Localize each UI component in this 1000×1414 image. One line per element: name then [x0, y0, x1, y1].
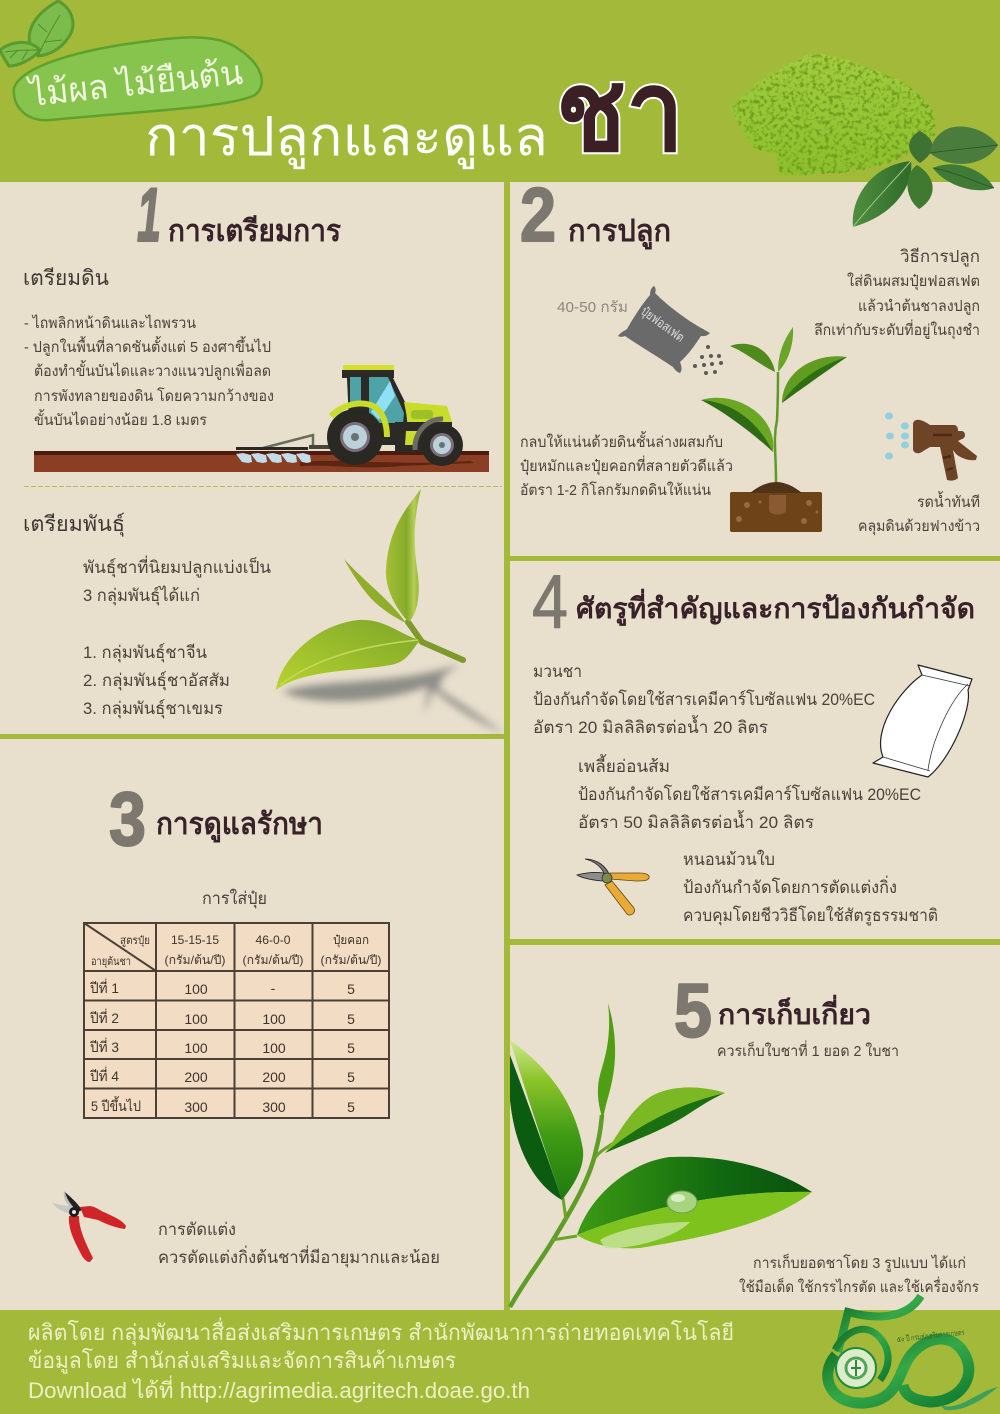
table: fertilizer rates: ปีที่ 1 — [90, 979, 119, 996]
text block: leaf roller — [683, 849, 938, 926]
illustration: fresh tea branch — [510, 1003, 812, 1307]
subheading: fertilizing: การใส่ปุ๋ย — [202, 888, 267, 909]
table: fertilizer rates: (กรัม/ต้น/ปี) — [320, 953, 382, 967]
table: fertilizer rates: 5 — [347, 1011, 355, 1027]
text block: tea bug: ป้องกันกำจัดโดยใช้สารเคมีคาร์โบซัลแฟน 20%EC — [533, 689, 875, 709]
footer: credits: Download ได้ที่ http://agrimedia.agritech.doae.go.th — [28, 1375, 530, 1403]
text block: tea varieties: 3 กลุ่มพันธุ์ได้แก่ — [83, 585, 200, 606]
panel: preparation — [0, 173, 504, 734]
footer: credits — [0, 1310, 1000, 1414]
text block: watering: รดน้ำทันที — [917, 491, 980, 511]
table: fertilizer rates: 100 — [262, 1040, 286, 1056]
table: fertilizer rates: (กรัม/ต้น/ปี) — [164, 953, 226, 967]
table: fertilizer rates: ปีที่ 2 — [90, 1009, 119, 1026]
text block: planting method: แล้วนำต้นชาลงปลูก — [858, 298, 980, 315]
icon: white chemical bag — [873, 665, 972, 777]
icon: phosphate fertilizer bag: ปุ๋ยฟอสเฟต — [638, 303, 688, 346]
text block: orange aphid: อัตรา 50 มิลลิลิตรต่อน้ำ 20 ลิตร — [578, 810, 814, 832]
text block: orange aphid: ป้องกันกำจัดโดยใช้สารเคมีคาร์โบซัลแฟน 20%EC — [578, 784, 921, 804]
panel: planting — [510, 173, 1000, 556]
number 4: 4 — [532, 560, 568, 645]
heading: pests: ศัตรูที่สำคัญและการป้องกันกำจัด — [576, 588, 975, 626]
heading: care: การดูแลรักษา — [156, 808, 323, 843]
text block: planting method: ลึกเท่ากับระดับที่อยู่ในถุงชำ — [814, 319, 980, 340]
table: fertilizer rates: ปุ๋ยคอก — [333, 933, 369, 948]
table: fertilizer rates: 100 — [184, 1011, 208, 1027]
table: fertilizer rates: 200 — [262, 1069, 286, 1085]
text block: planting method: วิธีการปลูก — [900, 247, 980, 267]
text block: tea bug — [533, 662, 875, 737]
text block: tea bug: มวนชา — [533, 662, 582, 681]
heading: harvest: การเก็บเกี่ยว — [718, 994, 871, 1030]
text block: soil preparation: การพังทลายของดิน โดยความกว้างของ — [34, 387, 274, 405]
text block: watering — [858, 491, 980, 536]
illustration: young tea leaf — [276, 489, 504, 733]
text block: pruning — [158, 1220, 440, 1268]
table: fertilizer rates: 300 — [184, 1099, 208, 1115]
table: fertilizer rates: อายุต้นชา — [91, 956, 131, 968]
text block: harvest methods — [739, 1253, 979, 1296]
text block: covering soil: ปุ๋ยหมักและปุ๋ยคอกที่สลายตัวดีแล้ว — [520, 455, 733, 476]
table: fertilizer rates: 5 ปีขึ้นไป — [91, 1096, 141, 1114]
table: fertilizer rates: 5 — [347, 1099, 355, 1115]
table: fertilizer rates: 100 — [262, 1011, 286, 1027]
text block: covering soil — [520, 431, 733, 499]
dashed divider — [24, 486, 502, 488]
text block: tea varieties: 3. กลุ่มพันธุ์ชาเขมร — [83, 699, 223, 719]
text block: soil preparation: - ปลูกในพื้นที่ลาดชันตั้งแต่ 5 องศาขึ้นไป — [24, 336, 271, 356]
panel: care — [0, 739, 504, 1310]
subheading: soil preparation: เตรียมดิน — [23, 267, 109, 290]
text block: tea varieties: 1. กลุ่มพันธุ์ชาจีน — [83, 643, 207, 663]
text block: soil preparation — [24, 314, 274, 429]
text block: tea varieties — [83, 555, 271, 719]
badge: fruit and perennial trees — [0, 1, 262, 120]
text block: pruning: ควรตัดแต่งกิ่งต้นชาที่มีอายุมากและน้อย — [158, 1245, 440, 1268]
text block: watering: คลุมดินด้วยฟางข้าว — [858, 518, 980, 536]
text block: soil preparation: - ไถพลิกหน้าดินและไถพรวน — [24, 314, 196, 332]
table: fertilizer rates: - — [271, 980, 276, 996]
text block: leaf roller: ควบคุมโดยชีววิธีโดยใช้สัตรูธรรมชาติ — [683, 905, 938, 926]
illustration: tea seedling in soil — [701, 327, 847, 532]
text block: harvest methods: ใช้มือเด็ด ใช้กรรไกรตัด และใช้เครื่องจักร — [739, 1276, 979, 1296]
title: tea: ชา — [556, 49, 684, 174]
panel: pests — [510, 560, 1000, 939]
number 3: 3 — [109, 777, 146, 862]
number 2: 2 — [520, 173, 556, 258]
table: fertilizer rates: 15-15-15 — [171, 933, 219, 947]
panel: harvest — [510, 945, 1000, 1310]
text block: pruning: การตัดแต่ง — [158, 1220, 236, 1239]
text block: planting method: ใส่ดินผสมปุ๋ยฟอสเฟต — [847, 272, 980, 291]
footer: credits: ข้อมูลโดย สำนักส่งเสริมและจัดการสินค้าเกษตร — [28, 1348, 456, 1374]
text block: tea varieties: พันธุ์ชาที่นิยมปลูกแบ่งเป็น — [83, 555, 271, 578]
table: fertilizer rates: ปีที่ 4 — [90, 1067, 119, 1084]
footer: credits: ผลิตโดย กลุ่มพัฒนาสื่อส่งเสริมการเกษตร สำนักพัฒนาการถ่ายทอดเทคโนโลยี — [28, 1317, 734, 1346]
text block: covering soil: กลบให้แน่นด้วยดินชั้นล่างผสมกับ — [520, 431, 723, 451]
text block: soil preparation: ขั้นบันไดอย่างน้อย 1.8 เมตร — [34, 409, 207, 429]
badge: fruit and perennial trees: ไม้ผล ไม้ยืนต้น — [25, 53, 245, 114]
icon: phosphate fertilizer bag — [618, 286, 723, 375]
heading: preparation: การเตรียมการ — [168, 215, 341, 248]
table: fertilizer rates: 300 — [262, 1099, 286, 1115]
logo: 50th anniversary emblem — [828, 1296, 998, 1410]
table: fertilizer rates: 46-0-0 — [256, 933, 291, 947]
text block: leaf roller: หนอนม้วนใบ — [683, 849, 775, 869]
text block: planting method — [814, 247, 980, 340]
illustration: tractor ploughing — [34, 365, 489, 472]
table: fertilizer rates: 100 — [184, 981, 208, 997]
number 1: 1 — [137, 173, 161, 258]
illustration: fresh tea leaves over powder — [853, 126, 998, 227]
text: harvest stage: ควรเก็บใบชาที่ 1 ยอด 2 ใบชา — [717, 1040, 899, 1060]
text block: soil preparation: ต้องทำขั้นบันไดและวางแนวปลูกเพื่อลด — [34, 360, 271, 380]
table: fertilizer rates: (กรัม/ต้น/ปี) — [242, 953, 304, 967]
title: growing and caring: การปลูกและดูแล — [145, 107, 548, 169]
table: fertilizer rates: 5 — [347, 1069, 355, 1085]
text block: harvest methods: การเก็บยอดชาโดย 3 รูปแบบ ได้แก่ — [753, 1253, 966, 1272]
heading: planting: การปลูก — [568, 215, 671, 250]
label: fertilizer amount: 40-50 กรัม — [557, 299, 628, 316]
table: fertilizer rates: สูตรปุ๋ย — [120, 935, 150, 947]
table: fertilizer rates: 5 — [347, 1040, 355, 1056]
text block: tea bug: อัตรา 20 มิลลิลิตรต่อน้ำ 20 ลิตร — [533, 715, 768, 737]
header banner — [0, 0, 1000, 182]
table: fertilizer rates: 100 — [184, 1040, 208, 1056]
number 5: 5 — [674, 969, 712, 1054]
table: fertilizer rates — [84, 923, 389, 1118]
subheading: variety preparation: เตรียมพันธุ์ — [23, 512, 125, 537]
text block: leaf roller: ป้องกันกำจัดโดยการตัดแต่งกิ่ง — [683, 875, 897, 897]
illustration: matcha powder — [730, 53, 935, 175]
icon: watering nozzle — [885, 412, 977, 481]
logo: 50th anniversary emblem: ๕๐ ปี กรมส่งเสริมการเกษตร — [896, 1328, 965, 1344]
text block: tea varieties: 2. กลุ่มพันธุ์ชาอัสสัม — [83, 671, 230, 691]
icon: red pruning shears — [52, 1191, 126, 1262]
table: fertilizer rates: 5 — [347, 981, 355, 997]
table: fertilizer rates: ปีที่ 3 — [90, 1038, 119, 1055]
text block: orange aphid — [578, 754, 921, 832]
table: fertilizer rates: 200 — [184, 1069, 208, 1085]
text block: orange aphid: เพลี้ยอ่อนส้ม — [578, 754, 670, 776]
icon: yellow pruning shears — [577, 859, 649, 915]
text block: covering soil: อัตรา 1-2 กิโลกรัมกดดินให้แน่น — [520, 481, 711, 499]
